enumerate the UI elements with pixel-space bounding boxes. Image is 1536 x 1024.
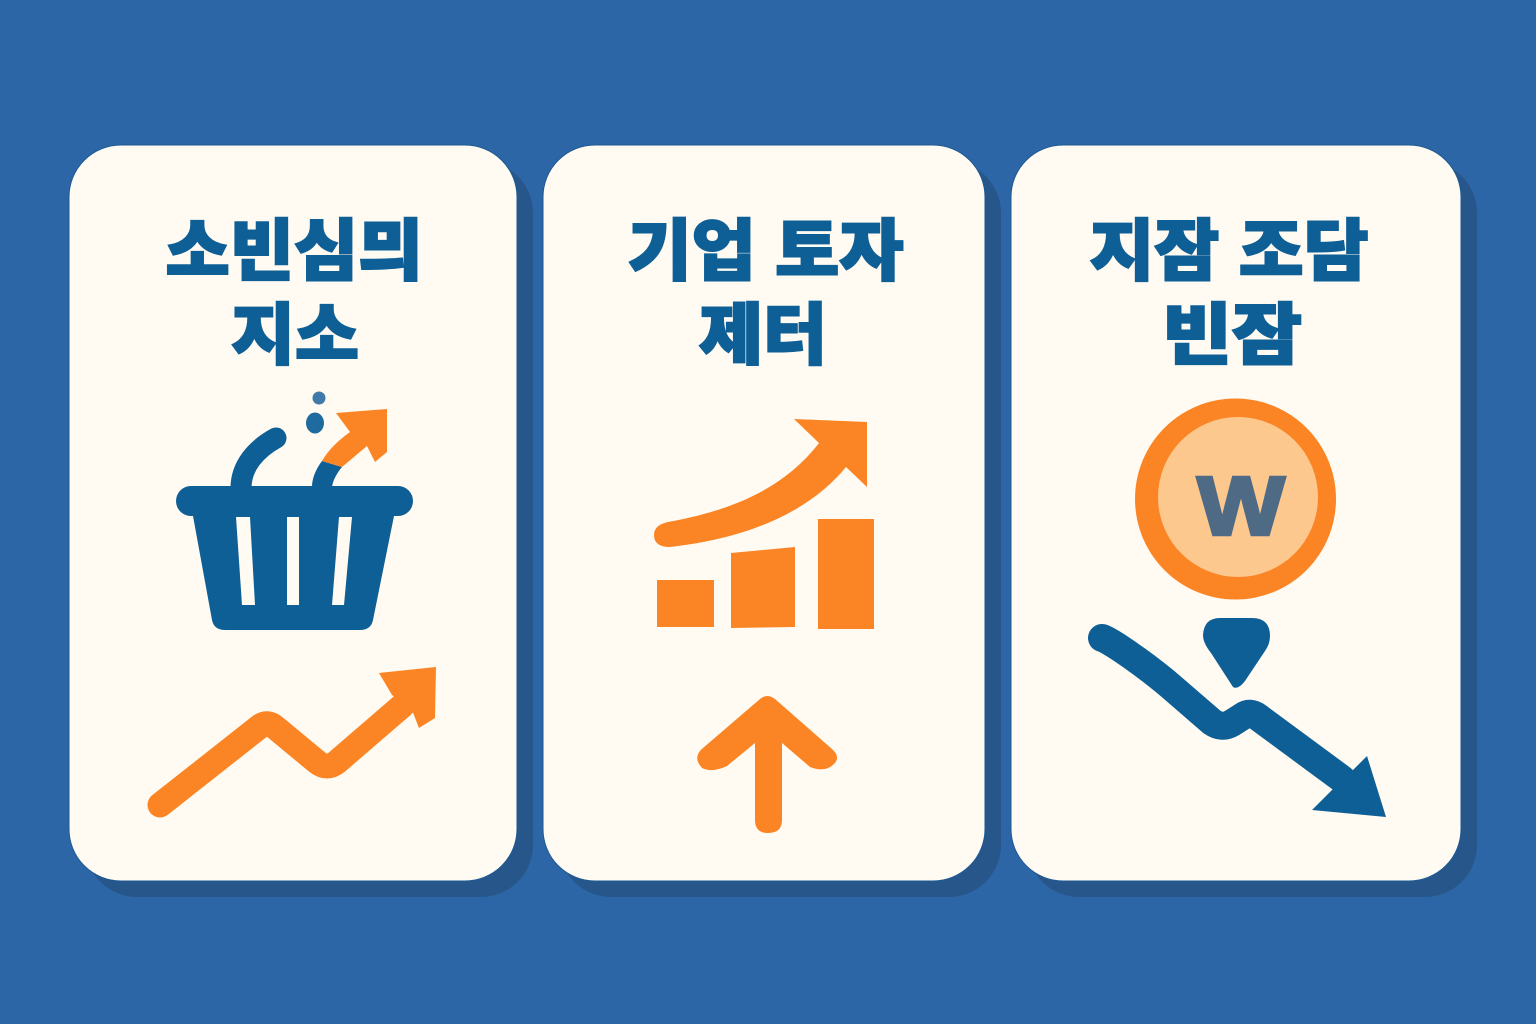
heading: funding conditions	[1090, 214, 1368, 374]
heading: funding conditions: 빈잠	[1162, 298, 1302, 374]
panel: consumer sentiment	[69, 145, 533, 897]
icon: rising trend arrow	[160, 667, 436, 805]
heading: corporate investment: 기업 토자	[628, 214, 904, 290]
panel: corporate investment	[543, 145, 1001, 897]
icon: shopping basket with rising arrow	[176, 392, 413, 630]
icon: falling trend arrow	[1102, 638, 1386, 817]
panel: funding conditions	[1011, 145, 1477, 897]
heading: funding conditions: 지잠 조담	[1090, 214, 1368, 290]
icon: up arrow	[697, 696, 837, 833]
heading: consumer sentiment: 지소	[231, 298, 359, 374]
heading: corporate investment	[628, 214, 904, 374]
heading: corporate investment: 제터	[699, 298, 827, 374]
heading: consumer sentiment	[166, 214, 422, 374]
icon: down marker	[1203, 618, 1270, 688]
icon: bar chart with growth arrow	[654, 419, 874, 629]
icon: currency coin: W	[1198, 460, 1285, 552]
heading: consumer sentiment: 소빈심믜	[166, 214, 422, 290]
icon: currency coin	[1135, 398, 1336, 600]
